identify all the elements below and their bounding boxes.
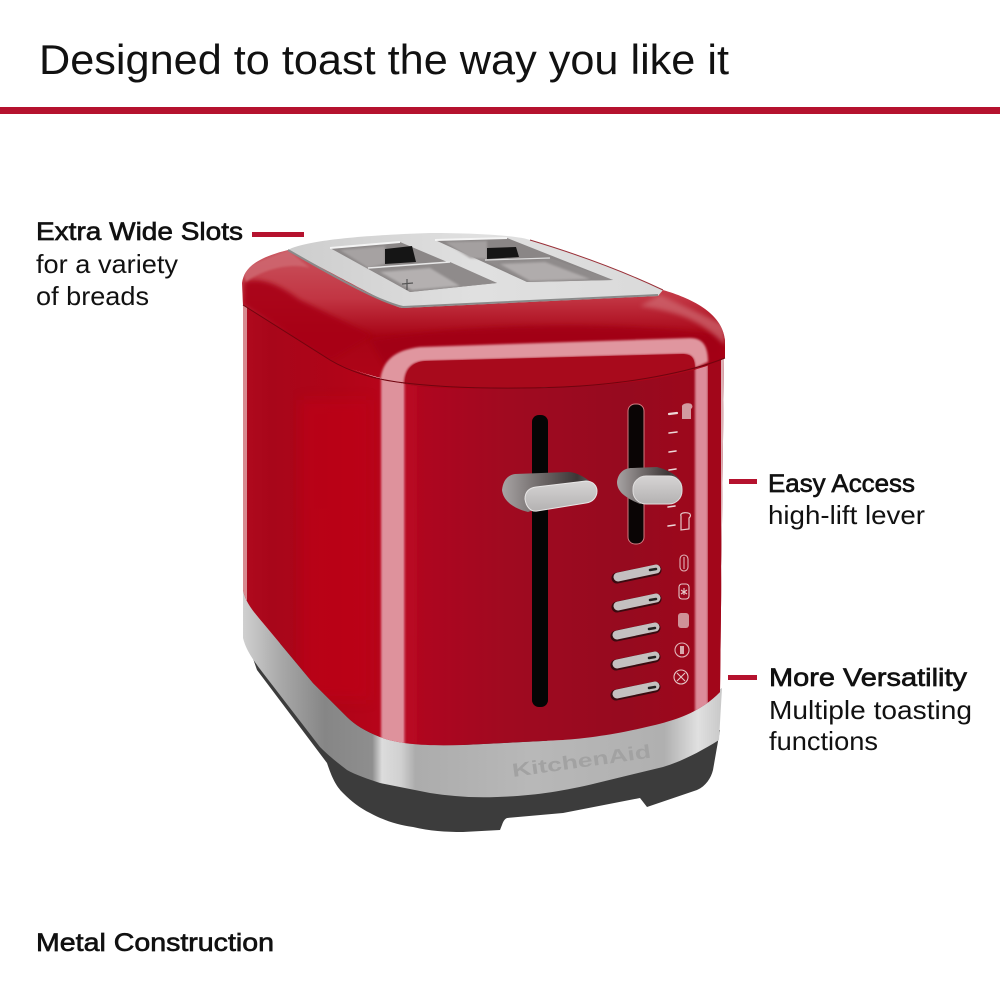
- icon: dark toast: [682, 403, 692, 419]
- lid highlights: [242, 250, 725, 390]
- red body: [243, 300, 724, 745]
- top lid: [242, 250, 725, 389]
- footer label: Metal Construction: [36, 929, 274, 957]
- lift lever slot: [532, 415, 548, 707]
- top tray: [288, 233, 663, 308]
- browning lever slot: [628, 404, 644, 544]
- browning lever: [617, 467, 682, 504]
- callout: more versatility: functions: [769, 726, 878, 756]
- toaster product illustration: [242, 233, 725, 832]
- icon: reheat circle: [675, 643, 689, 657]
- title: Designed to toast the way you like it: [39, 36, 729, 83]
- callout: easy access: Easy Access: [768, 470, 915, 498]
- callout: easy access: high-lift lever: [768, 500, 925, 530]
- lift lever: [502, 472, 597, 512]
- right bread slot: [435, 238, 613, 282]
- callout: more versatility: [728, 664, 972, 756]
- browning ticks: [668, 413, 677, 526]
- left bread slot: [330, 242, 497, 292]
- callout: easy access: [729, 470, 925, 530]
- icon: reheat toast: [678, 613, 689, 628]
- function buttons: [616, 569, 656, 695]
- callout: extra wide slots: for a variety: [36, 249, 178, 279]
- callout: more versatility: More Versatility: [769, 664, 968, 692]
- header rule: [0, 107, 1000, 114]
- icon: light toast: [681, 513, 690, 530]
- callout: extra wide slots: [36, 218, 304, 311]
- icon: frozen: [679, 584, 689, 599]
- brand name: KitchenAid: [511, 742, 652, 782]
- icon: bagel: [680, 555, 688, 571]
- callout: more versatility: Multiple toasting: [769, 695, 972, 725]
- icon: cancel: [674, 670, 688, 684]
- lid seam: [243, 305, 725, 388]
- callout: extra wide slots: Extra Wide Slots: [36, 218, 243, 246]
- toaster base: [243, 630, 720, 832]
- body highlights: [243, 300, 724, 745]
- steel band: [243, 585, 722, 797]
- callout: extra wide slots: of breads: [36, 281, 149, 311]
